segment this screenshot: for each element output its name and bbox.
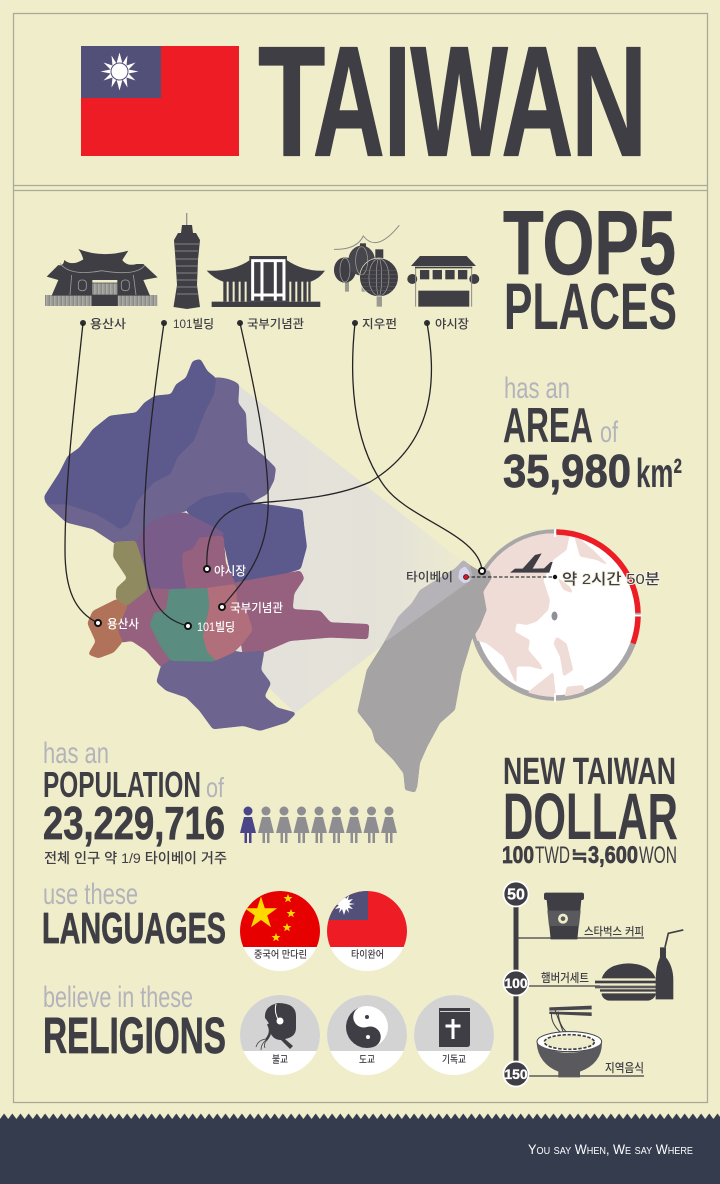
- religion: Taoism: 도교: [359, 1055, 375, 1066]
- footer: [0, 1114, 720, 1184]
- map labels: 국부기념관: [230, 601, 283, 615]
- label: Starbucks coffee: 스타벅스 커피: [584, 925, 644, 938]
- religion: Christianity: [414, 995, 494, 1075]
- area heading: [503, 372, 682, 497]
- heading: top 5 places: [503, 193, 677, 343]
- place labels: 용산사: [90, 317, 126, 331]
- price timeline: [514, 894, 644, 1076]
- price 50: 50: [507, 886, 525, 904]
- religions heading: [43, 981, 226, 1064]
- language: Taiwanese: [327, 891, 407, 971]
- icon: Taipei 101: [174, 213, 200, 309]
- map: Taipei districts: [45, 360, 368, 730]
- currency heading: 100: [502, 842, 534, 869]
- map labels: 101빌딩: [197, 620, 235, 634]
- price 100: 100: [504, 975, 528, 991]
- connector lines: [65, 323, 482, 626]
- area heading: has an: [504, 372, 570, 405]
- flag of Taiwan: [81, 46, 239, 156]
- language: Mandarin: 중국어 만다린: [254, 949, 307, 961]
- flight range circle: [467, 529, 642, 703]
- area heading: 35,980: [503, 445, 631, 497]
- label: local food: 지역음식: [605, 1061, 644, 1075]
- languages heading: [42, 878, 226, 953]
- connector end points: [95, 566, 485, 629]
- icon: airplane: [510, 553, 553, 573]
- map labels: [107, 564, 283, 634]
- icon: noodle bowl: [537, 1006, 602, 1077]
- languages heading: use these: [43, 878, 138, 911]
- population heading: 전체 인구 약 1/9 타이베이 거주: [44, 850, 227, 866]
- icon: night market: [407, 256, 479, 307]
- religion: Taoism: [327, 995, 407, 1075]
- zoom beam: [230, 385, 470, 713]
- religion: Buddhism: [240, 995, 320, 1075]
- price 100: [504, 970, 528, 996]
- Taipei and flight time labels: 약 2시간 50분: [562, 571, 660, 588]
- religion: Buddhism: 불교: [272, 1054, 288, 1066]
- price 150: 150: [504, 1066, 528, 1082]
- title: T: [258, 14, 325, 190]
- currency heading: WON: [639, 842, 677, 869]
- area heading: AREA: [503, 399, 593, 453]
- title: N: [571, 14, 647, 190]
- title: A: [313, 14, 385, 190]
- Taipei and flight time labels: [406, 570, 660, 588]
- title: A: [501, 14, 573, 190]
- icon: Longshan temple: [45, 249, 158, 306]
- Taiwan island: [357, 560, 492, 793]
- place labels: 국부기념관: [247, 317, 304, 331]
- icon: coffee cup: [544, 893, 584, 939]
- area heading: km²: [636, 450, 682, 496]
- Taipei and flight time labels: 타이베이: [406, 570, 453, 584]
- title: W: [410, 14, 508, 190]
- map labels: 야시장: [214, 564, 246, 578]
- currency heading: ≒: [571, 843, 588, 868]
- flight connector: [464, 574, 557, 580]
- population heading: POPULATION: [43, 764, 201, 805]
- price 50: [504, 882, 528, 906]
- label: hamburger set: 햄버거세트: [541, 970, 589, 985]
- religion: Christianity: 기독교: [442, 1054, 466, 1066]
- population heading: has an: [43, 737, 109, 770]
- place labels: 101빌딩: [173, 317, 214, 331]
- language: Taiwanese: 타이완어: [351, 948, 384, 961]
- place labels: [80, 317, 469, 331]
- population heading: of: [206, 772, 224, 803]
- currency heading: TWD: [535, 842, 570, 869]
- religions heading: RELIGIONS: [43, 1007, 226, 1064]
- currency heading: [502, 751, 678, 869]
- map labels: 용산사: [107, 617, 139, 631]
- area heading: of: [600, 416, 618, 449]
- title: [258, 14, 647, 190]
- place labels: 지우펀: [362, 317, 397, 331]
- currency heading: 3,600: [588, 842, 638, 869]
- population heading: 23,229,716: [43, 797, 225, 849]
- population heading: [43, 737, 227, 866]
- icon: burger and cola: [595, 930, 683, 1001]
- title: I: [384, 14, 411, 190]
- religions heading: believe in these: [43, 981, 193, 1014]
- language: Mandarin: [240, 891, 320, 971]
- price 150: [504, 1062, 528, 1086]
- icon: Jiufen lanterns: [334, 225, 399, 307]
- footer: You say When, We say Where: [528, 1141, 693, 1157]
- place labels: 야시장: [435, 317, 469, 331]
- population pictogram: [240, 806, 397, 843]
- icon: Sun Yat-sen memorial hall: [207, 256, 325, 307]
- languages heading: LANGUAGES: [42, 904, 226, 953]
